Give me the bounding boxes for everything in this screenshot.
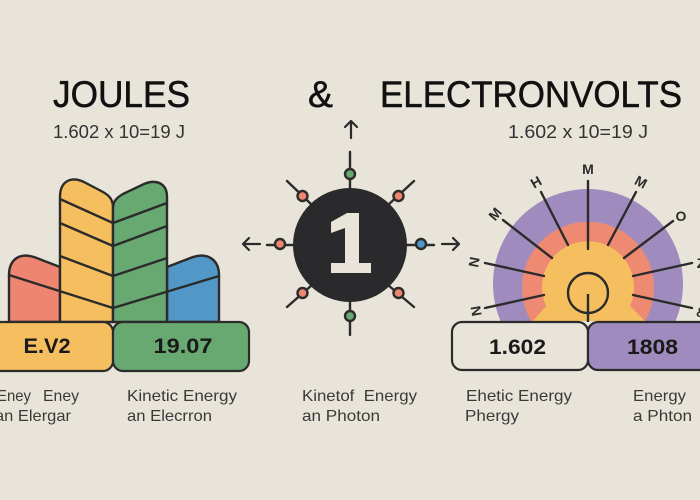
label: right column two (633, 388, 692, 425)
label: left column two (127, 388, 237, 425)
core circle (293, 188, 407, 302)
label: right column two: a Phton (633, 408, 692, 425)
spokes (267, 152, 434, 335)
stat box: E.V2: E.V2 (24, 335, 70, 358)
bar: blue (167, 256, 219, 322)
label: right column two: Energy (633, 388, 686, 405)
subtitle: right value: 1.602 x 10=19 J (508, 122, 648, 142)
bar divider lines (9, 199, 219, 308)
label: left column two: Kinetic Energy (127, 388, 237, 405)
label: center column (302, 388, 417, 425)
arrows (243, 121, 459, 250)
purple ring (493, 189, 683, 321)
center ring (568, 273, 608, 313)
panel: electronvolts radial diagram (465, 161, 700, 322)
bar: yellow (60, 180, 113, 322)
radial letters: M (485, 204, 505, 224)
label: right column one: Ehetic Energy (466, 388, 572, 405)
label: center column: Kinetof Energy (302, 388, 417, 405)
radial letters: H (528, 173, 544, 191)
radial letters: M (582, 161, 594, 177)
stat box: 1.602: 1.602 (489, 336, 546, 359)
radial letters: N (465, 256, 483, 268)
center stem (587, 294, 589, 322)
node dots (275, 169, 426, 321)
bar: red (9, 256, 60, 322)
radial letters: O (676, 208, 687, 224)
radial letters: N (467, 305, 485, 317)
label: right column one (465, 388, 572, 425)
label: right column one: Phergy (465, 408, 519, 425)
bar: green (113, 182, 167, 322)
subtitle: left value: 1.602 x 10=19 J (53, 122, 185, 142)
radial letters (465, 161, 700, 320)
label: left column two: an Elecrron (127, 408, 212, 425)
stat box: 1808: 1808 (627, 336, 678, 359)
radial lines (485, 181, 692, 308)
stat box: 19.07 (113, 322, 249, 371)
label: center column: an Photon (302, 408, 380, 425)
panel: central particle diagram (243, 121, 459, 335)
panel: joules bar chart (9, 180, 219, 322)
title: joules: JOULES (53, 74, 190, 115)
orange ring (522, 222, 654, 321)
label: left column one (0, 388, 79, 425)
core numeral (331, 213, 371, 273)
stat box: 1.602 (452, 322, 588, 370)
title: ampersand: & (308, 74, 333, 115)
stat box: E.V2 (0, 322, 113, 371)
stat box: 1808 (588, 322, 700, 370)
stat box: 19.07: 19.07 (154, 335, 212, 358)
label: left column one: Eney (43, 388, 79, 405)
title: electronvolts: ELECTRONVOLTS (380, 74, 682, 115)
radial letters: M (632, 172, 650, 192)
yellow core (533, 241, 645, 321)
